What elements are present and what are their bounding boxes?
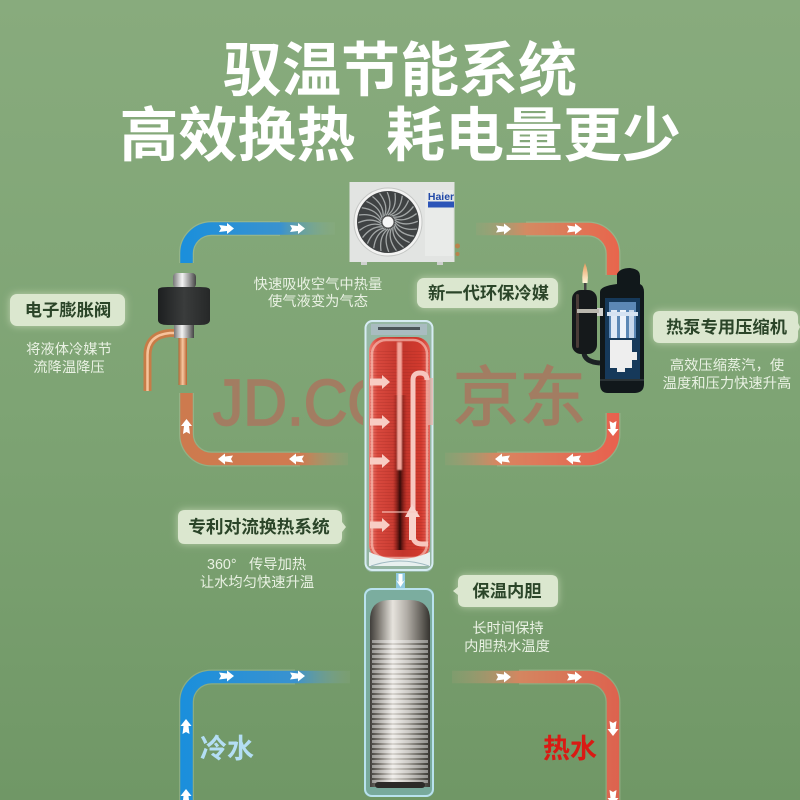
label: cold water: 冷水 bbox=[200, 734, 254, 764]
label: convection system: 专利对流换热系统 bbox=[188, 516, 330, 537]
text: expansion valve description bbox=[26, 341, 112, 376]
label: new refrigerant bbox=[417, 278, 558, 308]
icon: outdoor heat pump unit: Haier bbox=[428, 191, 454, 203]
text: compressor description: 高效压缩蒸汽，使 bbox=[670, 357, 784, 374]
text: evaporator description: 使气液变为气态 bbox=[268, 293, 368, 310]
pipe: blue refrigerant top left bbox=[186, 223, 335, 263]
text: inner tank description bbox=[464, 620, 550, 655]
text: evaporator description bbox=[254, 276, 382, 310]
arrow: link between tanks bbox=[396, 573, 405, 589]
text: compressor description: 温度和压力快速升高 bbox=[663, 375, 791, 392]
title bbox=[119, 38, 681, 169]
text: convection description: 让水均匀快速升温 bbox=[200, 574, 314, 591]
text: convection description: 360° bbox=[207, 557, 237, 573]
icon: outdoor heat pump unit bbox=[350, 182, 460, 265]
text: compressor description bbox=[663, 357, 791, 392]
title: 驭温节能系统 bbox=[223, 38, 577, 104]
watermark: JD.COM bbox=[213, 366, 445, 439]
label: new refrigerant: 新一代环保冷媒 bbox=[428, 283, 549, 303]
label: compressor: 热泵专用压缩机 bbox=[666, 317, 788, 337]
tank: insulated inner tank bbox=[364, 588, 434, 797]
heat arrows and coil bbox=[370, 373, 433, 544]
title: 高效换热 bbox=[119, 103, 356, 169]
pipe: red refrigerant bottom right bbox=[445, 413, 618, 464]
text: evaporator description: 快速吸收空气中热量 bbox=[254, 276, 382, 293]
icon: compressor bbox=[572, 263, 644, 393]
text: inner tank description: 长时间保持 bbox=[472, 620, 544, 637]
label: hot water: 热水 bbox=[543, 734, 597, 764]
label: convection system bbox=[178, 510, 346, 544]
text: convection description: 传导加热 bbox=[249, 556, 306, 573]
text: expansion valve description: 流降温降压 bbox=[33, 359, 105, 376]
text: convection description bbox=[200, 556, 314, 591]
label: inner tank: 保温内胆 bbox=[472, 581, 542, 601]
pipe: red refrigerant top right bbox=[476, 224, 613, 275]
title: 耗电量更少 bbox=[386, 103, 681, 169]
label: compressor bbox=[653, 311, 800, 343]
label: inner tank bbox=[453, 575, 558, 607]
watermark: 京东 bbox=[453, 345, 586, 439]
pipe: orange refrigerant bottom left bbox=[181, 393, 348, 464]
label: expansion valve: 电子膨胀阀 bbox=[25, 300, 111, 320]
text: inner tank description: 内胆热水温度 bbox=[464, 638, 550, 655]
label: expansion valve bbox=[10, 294, 125, 326]
text: expansion valve description: 将液体冷媒节 bbox=[26, 341, 112, 358]
icon: expansion valve bbox=[148, 273, 210, 391]
tank: heat exchanger bbox=[365, 320, 433, 572]
pipe: cold water bbox=[180, 670, 350, 800]
pipe: hot water bbox=[452, 672, 618, 800]
watermark bbox=[213, 364, 583, 426]
